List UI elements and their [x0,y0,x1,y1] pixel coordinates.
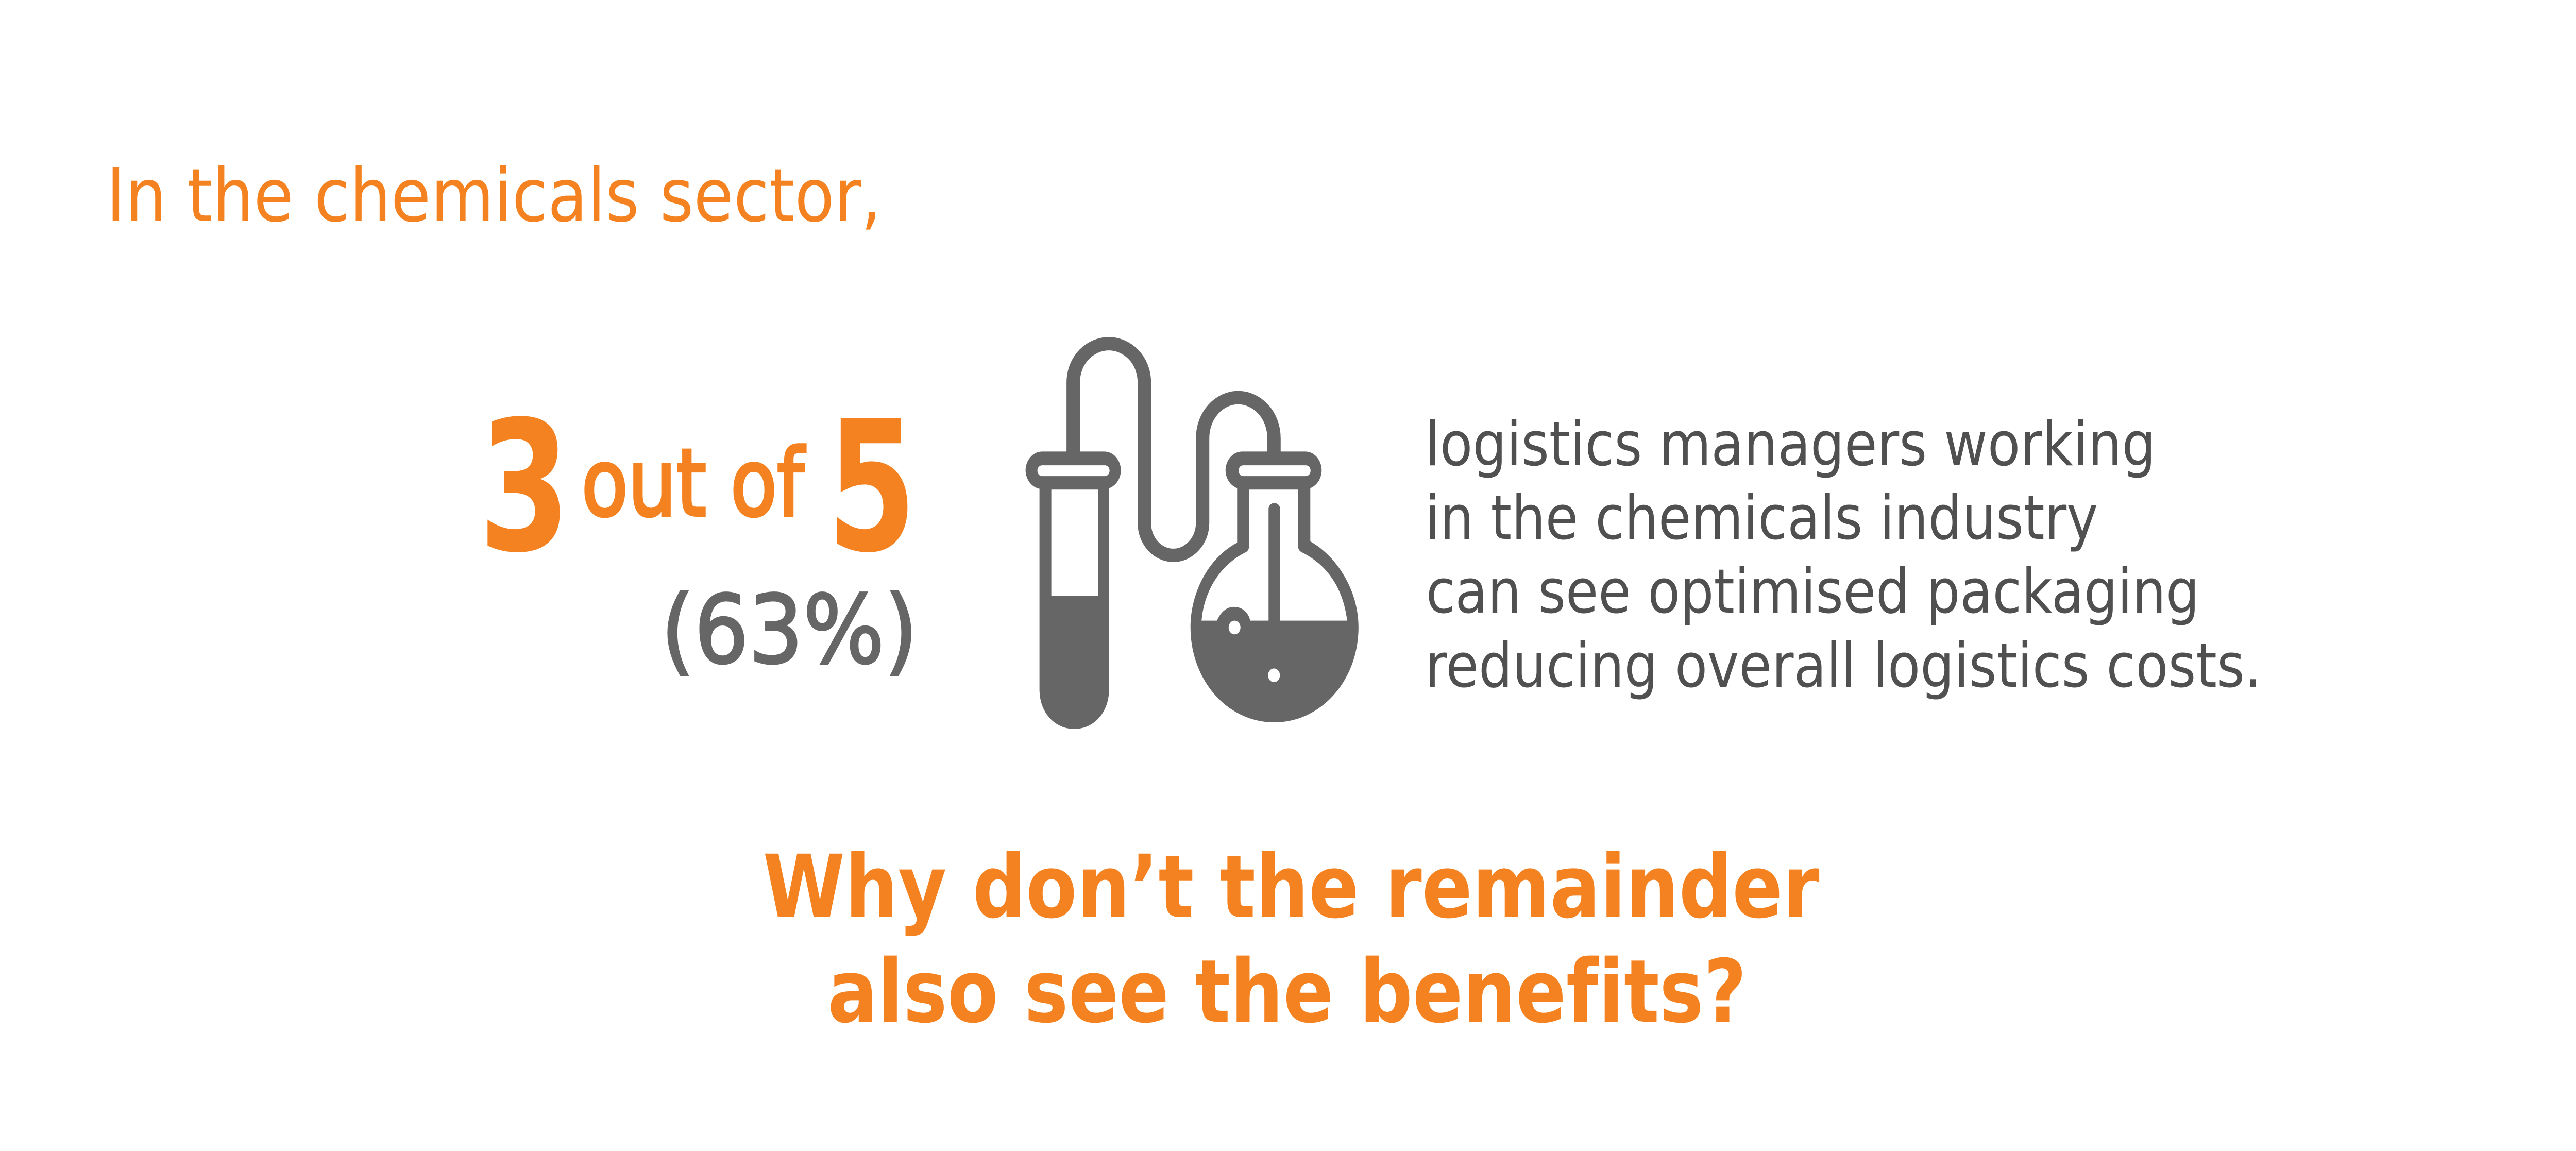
icon part: test tube [1040,486,1109,729]
icon part: test tube cap [1026,451,1121,489]
statistic: 3 out of 5 [479,383,917,593]
statistic: 3 out of 5: out of [582,429,806,537]
text block: logistics managers description: can see optimised packaging [1426,556,2199,628]
heading: In the chemicals sector: In the chemicals sector, [106,153,882,239]
text block: logistics managers description: in the chemicals industry [1425,483,2098,554]
statistic: 3 out of 5: 3 [479,383,570,593]
icon part: flask [1191,486,1359,722]
icon part: flask cap [1226,451,1321,489]
text block: logistics managers description [1425,409,2262,702]
text block: logistics managers description: logistics managers working [1425,409,2156,480]
question: why don't the remainder: also see the benefits? [827,941,1747,1043]
icon: test tube connected to flask [1026,344,1359,729]
text block: logistics managers description: reducing overall logistics costs. [1425,631,2262,702]
statistic: 3 out of 5: 5 [827,383,917,593]
icon part: bubbles [1229,621,1280,682]
statistic: 63 percent: (63%) [661,576,918,685]
question: why don't the remainder [763,837,1820,1043]
question: why don't the remainder: Why don’t the remainder [763,837,1820,938]
icon part: connecting pipe [1073,344,1274,555]
